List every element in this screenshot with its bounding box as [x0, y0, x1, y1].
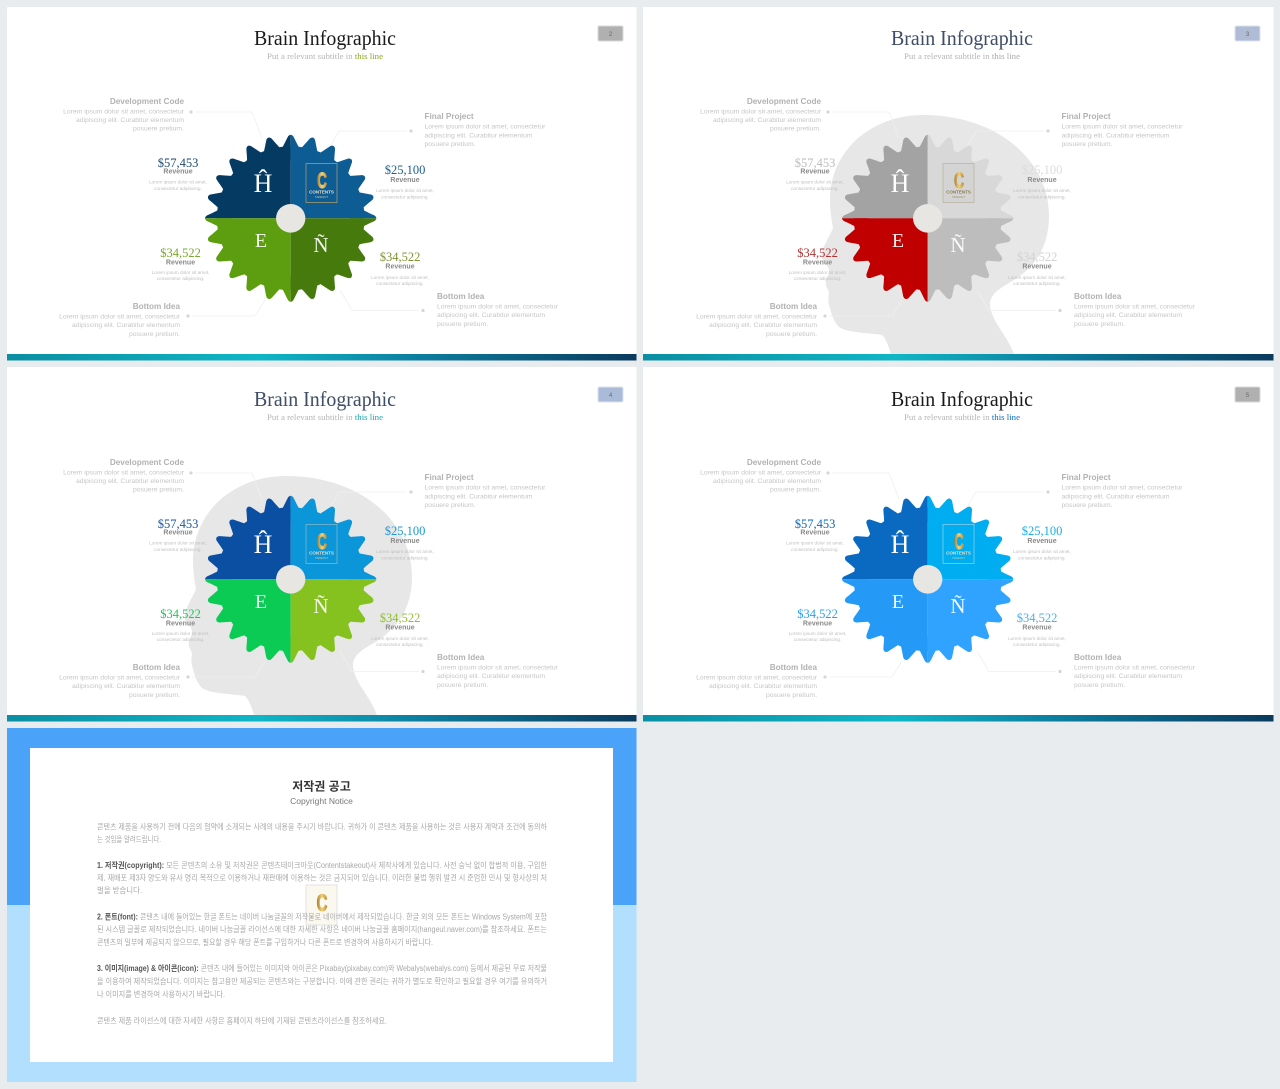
icon: logo watermark — [306, 885, 337, 925]
stat: 57,453: consectetur adipiscing. — [791, 186, 839, 191]
gear chart — [205, 496, 376, 663]
text block: development code: adipiscing elit. Curabitur elementum — [713, 478, 821, 485]
icon: logo — [306, 164, 337, 202]
stat: 34,522 right: Lorem ipsum dolor sit amet, — [1008, 636, 1066, 641]
slide panel — [7, 7, 636, 354]
text block: bottom idea left: adipiscing elit. Curabitur elementum — [709, 683, 817, 690]
page number badge — [1235, 387, 1260, 402]
text block: development code: adipiscing elit. Curabitur elementum — [76, 117, 184, 124]
text block: development code — [63, 458, 185, 494]
stat: 34,522 left: Lorem ipsum dolor sit amet, — [789, 631, 846, 636]
icon: logo — [943, 524, 974, 564]
page number badge: 5 — [1246, 393, 1250, 399]
text block: bottom idea left: Bottom Idea — [133, 663, 180, 672]
icon: logo: C — [317, 529, 327, 554]
stat: 25,100: Revenue — [1027, 177, 1057, 184]
text block: bottom idea left: adipiscing elit. Curabitur elementum — [709, 322, 817, 329]
text block: bottom idea right: posuere pretium. — [1074, 682, 1125, 689]
stat: 34,522 right: consectetur adipiscing. — [1013, 281, 1061, 286]
gear letters: E — [892, 591, 904, 613]
stat: 34,522 left: consectetur adipiscing. — [157, 637, 204, 642]
paragraph 1: copyright: 제, 재배포 제3자 양도와 유사 영리 목적으로 이용하거나 재판매에 이용하는 것은 금지되어 있습니다. 이러한 불법 행위 발견 시 준엄한 민사 및 형사상의 처 — [97, 872, 547, 882]
text block: final project: adipiscing elit. Curabitur elementum — [1062, 132, 1170, 140]
subtitle: Put a relevant subtitle in this line — [904, 412, 1020, 422]
stat: 34,522 left — [152, 246, 209, 281]
text block: bottom idea left: Bottom Idea — [770, 663, 817, 672]
text block: bottom idea right: Lorem ipsum dolor sit amet, consectetur — [437, 664, 559, 672]
stat: 34,522 left: consectetur adipiscing. — [794, 276, 841, 281]
stat: 34,522 right: Revenue — [1022, 624, 1052, 632]
icon: logo: TAKEOUT — [315, 195, 328, 199]
bottom gradient bar — [7, 715, 636, 722]
text block: final project — [1062, 473, 1183, 509]
page number badge: 2 — [609, 32, 613, 38]
text block: bottom idea right — [437, 292, 559, 328]
stat: 57,453 — [786, 517, 844, 552]
notice subheading: Copyright Notice — [290, 796, 353, 806]
stat: 57,453: consectetur adipiscing. — [154, 186, 202, 191]
icon: logo: CONTENTS — [946, 190, 971, 194]
text block: bottom idea right: adipiscing elit. Curabitur elementum — [437, 673, 545, 680]
text block: development code: Development Code — [110, 97, 184, 106]
text block: bottom idea right: Bottom Idea — [437, 292, 485, 301]
slide 3: grey gear with red quadrant on head — [643, 7, 1274, 360]
icon: logo: TAKEOUT — [952, 556, 965, 560]
leader line: bottom idea left — [186, 300, 265, 318]
stat: 34,522 right: $34,522 — [380, 250, 420, 264]
text block: bottom idea right: adipiscing elit. Curabitur elementum — [1074, 673, 1182, 680]
text block: final project: adipiscing elit. Curabitur elementum — [424, 132, 533, 140]
bottom gradient bar — [7, 354, 636, 360]
text block: bottom idea right: adipiscing elit. Curabitur elementum — [437, 312, 545, 319]
stat: 25,100: Lorem ipsum dolor sit amet, — [1013, 188, 1071, 193]
page number badge: 4 — [609, 393, 613, 399]
text block: final project: Final Project — [424, 112, 474, 121]
text block: development code: Lorem ipsum dolor sit amet, consectetur — [63, 108, 185, 116]
gear chart — [842, 135, 1013, 302]
stat: 34,522 left: $34,522 — [160, 607, 201, 621]
stat: 25,100 — [376, 163, 434, 200]
text block: development code — [700, 97, 822, 132]
text block: bottom idea right: posuere pretium. — [437, 321, 488, 328]
stat: 57,453: Revenue — [800, 168, 830, 176]
stat: 25,100: Lorem ipsum dolor sit amet, — [1013, 549, 1071, 554]
gear letters — [891, 169, 966, 257]
icon: logo: TAKEOUT — [315, 556, 328, 560]
paragraph 3: image and icon — [97, 963, 547, 999]
stat: 34,522 right: $34,522 — [1017, 611, 1057, 625]
leader line: final project — [965, 490, 1050, 511]
background upper blue — [7, 728, 636, 905]
paragraph 2: font: 된 시스템 글꼴로 제작되었습니다. 네이버 나눔글꼴 라이선스에 대한 자세한 사항은 네이버 나눔글꼴 홈페이지(hangeul.naver.com)를 참조하세요. 폰트는 — [97, 924, 547, 934]
slide panel — [643, 7, 1274, 354]
stat: 34,522 left: Revenue — [166, 620, 195, 628]
stat: 34,522 right — [1008, 611, 1066, 647]
title: Brain Infographic — [891, 387, 1033, 411]
leader line: development code — [189, 110, 262, 138]
text block: bottom idea right: Bottom Idea — [437, 653, 485, 662]
stat: 57,453 — [786, 156, 844, 191]
icon: logo watermark: C — [317, 891, 327, 917]
text block: bottom idea left: adipiscing elit. Curabitur elementum — [72, 683, 180, 690]
gear chart — [842, 496, 1013, 663]
stat: 57,453 — [149, 156, 207, 191]
title: Brain Infographic — [254, 387, 396, 411]
stat: 34,522 right: $34,522 — [1017, 250, 1057, 264]
text block: development code: posuere pretium. — [133, 486, 184, 494]
text block: bottom idea left: posuere pretium. — [766, 331, 817, 338]
text block: bottom idea left: posuere pretium. — [766, 692, 817, 699]
gear chart — [205, 135, 376, 302]
gear letters: Ñ — [950, 594, 966, 618]
leader line: development code — [189, 471, 262, 499]
stat: 34,522 left — [152, 607, 209, 642]
stat: 34,522 right — [371, 611, 429, 647]
text block: development code: Development Code — [747, 97, 821, 106]
text block: development code: Lorem ipsum dolor sit amet, consectetur — [700, 470, 822, 476]
stat: 57,453: consectetur adipiscing. — [154, 547, 202, 552]
text block: bottom idea right: Lorem ipsum dolor sit amet, consectetur — [1074, 304, 1196, 310]
stat: 57,453: consectetur adipiscing. — [791, 547, 839, 552]
stat: 34,522 left: Lorem ipsum dolor sit amet, — [789, 270, 846, 275]
paragraph 2: font — [97, 912, 548, 947]
paragraph 3: image and icon: 나 이미지를 변경하여 사용하시기 바랍니다. — [97, 989, 225, 999]
icon: logo: TAKEOUT — [952, 195, 965, 199]
stat: 57,453: $57,453 — [795, 156, 835, 170]
gear letters: Ĥ — [891, 530, 910, 559]
gear letters: Ñ — [313, 233, 329, 257]
stat: 57,453 — [149, 517, 207, 552]
stat: 34,522 left: Lorem ipsum dolor sit amet, — [152, 270, 209, 275]
stat: 25,100: $25,100 — [1022, 524, 1062, 538]
icon: logo: CONTENTS — [309, 190, 334, 194]
icon: logo: CONTENTS — [309, 550, 334, 556]
gear letters: Ĥ — [254, 169, 273, 198]
text block: bottom idea left — [696, 302, 818, 338]
text block: bottom idea left: Lorem ipsum dolor sit amet, consectetur — [59, 674, 181, 682]
text block: final project: adipiscing elit. Curabitur elementum — [1062, 494, 1170, 500]
stat: 34,522 left: Lorem ipsum dolor sit amet, — [152, 631, 209, 636]
stat: 34,522 right: $34,522 — [380, 611, 420, 625]
leader line: development code — [826, 110, 899, 138]
stat: 57,453: Revenue — [163, 530, 193, 536]
text block: bottom idea left — [59, 302, 181, 338]
text block: final project: posuere pretium. — [424, 141, 476, 148]
text block: final project: Lorem ipsum dolor sit amet, consectetur — [424, 484, 546, 492]
text block: development code — [700, 458, 822, 494]
stat: 34,522 right: Lorem ipsum dolor sit amet, — [1008, 275, 1066, 280]
title: Brain Infographic — [891, 26, 1033, 50]
stat: 57,453: Lorem ipsum dolor sit amet, — [786, 540, 844, 546]
stat: 34,522 left: $34,522 — [797, 246, 838, 260]
text block: development code: posuere pretium. — [770, 486, 821, 494]
gear letters — [891, 530, 966, 618]
leader line: bottom idea left — [823, 300, 902, 318]
icon: logo: CONTENTS — [946, 550, 971, 556]
leader line: bottom idea right — [340, 651, 425, 673]
text block: bottom idea left: Lorem ipsum dolor sit amet, consectetur — [59, 314, 181, 320]
paragraph 3: image and icon: 을 이용하여 제작되었습니다. 이미지는 참고용만 제공되는 콘텐츠와는 구분합니다. 이에 관한 권리는 귀하가 별도로 확인하고 필요할 경우 여기를 유의하거 — [97, 976, 547, 986]
slide 6: copyright notice — [7, 728, 636, 1082]
stat: 34,522 left: consectetur adipiscing. — [157, 276, 204, 281]
stat: 34,522 right: consectetur adipiscing. — [376, 642, 424, 647]
text block: development code: adipiscing elit. Curabitur elementum — [713, 117, 821, 124]
page number badge — [1235, 26, 1260, 41]
intro paragraph: 콘텐츠 제품을 사용하기 전에 다음의 협약에 소개되는 사례의 내용을 주시기 바랍니다. 귀하가 이 콘텐츠 제품을 사용하는 것은 사용자 계약과 조건에 동의하 — [97, 822, 548, 832]
subtitle: Put a relevant subtitle in this line — [267, 51, 383, 61]
head silhouette — [822, 115, 1049, 354]
stat: 25,100 — [376, 524, 434, 560]
text block: final project — [424, 112, 546, 148]
stat: 34,522 left: consectetur adipiscing. — [794, 637, 841, 642]
text block: bottom idea right: posuere pretium. — [1074, 321, 1125, 328]
stat: 57,453: $57,453 — [158, 517, 198, 531]
stat: 34,522 right — [371, 250, 429, 286]
slide panel — [643, 367, 1274, 715]
leader line: bottom idea left — [186, 661, 265, 679]
stat: 25,100: Lorem ipsum dolor sit amet, — [376, 188, 434, 193]
stat: 34,522 left — [789, 246, 846, 281]
bottom gradient bar — [643, 354, 1274, 360]
text block: final project — [424, 473, 546, 509]
text block: bottom idea right — [1074, 292, 1196, 328]
paragraph 3: image and icon: 3. 이미지(image) & 아이콘(icon): 콘텐츠 내에 들어있는 이미지와 아이콘은 Pixabay(pixabay.com)와 Webalys(webalys.com) 등에서 제공된 무료 저작물 — [97, 963, 547, 973]
slide panel — [7, 367, 636, 715]
gear letters — [254, 530, 329, 618]
text block: development code: Lorem ipsum dolor sit amet, consectetur — [700, 108, 822, 116]
gear letters — [254, 169, 329, 257]
stat: 34,522 right: Lorem ipsum dolor sit amet, — [371, 636, 429, 641]
text block: bottom idea left: Lorem ipsum dolor sit amet, consectetur — [696, 674, 818, 682]
stat: 57,453: Revenue — [163, 168, 193, 176]
intro paragraph: 는 것임을 알려드립니다. — [97, 834, 161, 844]
slide 2: dark blue and green gear — [7, 7, 636, 360]
text block: bottom idea right: Bottom Idea — [1074, 653, 1122, 662]
text block: final project: Final Project — [1062, 112, 1111, 121]
leader line: bottom idea right — [340, 290, 425, 312]
gear letters: Ĥ — [891, 169, 910, 198]
text block: bottom idea left — [59, 663, 181, 699]
text block: final project: posuere pretium. — [1062, 141, 1113, 148]
text block: final project: posuere pretium. — [424, 502, 476, 509]
text block: final project — [1062, 112, 1183, 148]
text block: development code: posuere pretium. — [133, 126, 184, 132]
stat: 34,522 right: Revenue — [385, 624, 415, 632]
gear letters: Ĥ — [254, 530, 273, 559]
text block: bottom idea left: posuere pretium. — [129, 331, 180, 338]
white notice card — [30, 748, 613, 1062]
text block: bottom idea right: posuere pretium. — [437, 682, 488, 689]
text block: bottom idea left: Lorem ipsum dolor sit amet, consectetur — [696, 314, 818, 320]
icon: logo — [943, 164, 974, 202]
paragraph 2: font: 2. 폰트(font): 콘텐츠 내에 들어있는 한글 폰트는 네이버 나눔글꼴의 저작물로 네이버에서 제작되었습니다. 한글 외의 모든 폰트는 Windows System에 포함 — [97, 912, 548, 922]
stat: 25,100: $25,100 — [1022, 163, 1062, 177]
stat: 34,522 right: consectetur adipiscing. — [376, 281, 424, 286]
icon: logo: C — [317, 168, 327, 193]
text block: final project: Final Project — [424, 473, 474, 482]
paragraph 1: copyright: 벌을 받습니다. — [97, 885, 142, 895]
leader line: development code — [826, 471, 899, 499]
stat: 34,522 left — [789, 607, 846, 642]
notice heading: 저작권 공고 — [292, 778, 351, 794]
paragraph 2: font: 콘텐츠의 일부에 제공되지 않으므로, 필요할 경우 해당 폰트를 구입하거나 다른 폰트로 변경하여 사용하시기 바랍니다. — [97, 937, 433, 947]
closing line: 콘텐츠 제품 라이선스에 대한 자세한 사항은 홈페이지 하단에 기재된 콘텐츠라이선스를 참조하세요. — [97, 1016, 387, 1026]
stat: 34,522 left: Revenue — [803, 620, 832, 628]
stat: 34,522 right: Revenue — [1022, 264, 1052, 270]
stat: 25,100: consectetur adipiscing. — [381, 194, 429, 200]
stat: 57,453: Revenue — [800, 530, 830, 536]
stat: 25,100: $25,100 — [385, 524, 425, 538]
stat: 34,522 right: Lorem ipsum dolor sit amet, — [371, 275, 429, 280]
leader line: final project — [328, 490, 413, 511]
stat: 57,453: Lorem ipsum dolor sit amet, — [786, 180, 844, 184]
text block: bottom idea right: Lorem ipsum dolor sit amet, consectetur — [437, 304, 559, 310]
text block: final project: Lorem ipsum dolor sit amet, consectetur — [424, 124, 546, 130]
text block: final project: Final Project — [1062, 473, 1111, 482]
stat: 25,100 — [1013, 524, 1071, 560]
text block: bottom idea right — [437, 653, 559, 689]
text block: development code: adipiscing elit. Curabitur elementum — [76, 478, 184, 485]
page number badge — [598, 387, 623, 402]
subtitle: Put a relevant subtitle in this line — [267, 412, 383, 422]
stat: 34,522 right: consectetur adipiscing. — [1013, 642, 1061, 647]
leader line: final project — [965, 129, 1050, 150]
icon: logo: C — [954, 529, 964, 554]
stat: 25,100 — [1013, 163, 1071, 200]
stat: 34,522 left: $34,522 — [797, 607, 838, 621]
text block: bottom idea left: adipiscing elit. Curabitur elementum — [72, 322, 180, 329]
text block: final project: adipiscing elit. Curabitur elementum — [424, 494, 533, 500]
title: Brain Infographic — [254, 26, 396, 50]
text block: development code: Development Code — [747, 458, 821, 467]
icon: logo: C — [954, 168, 964, 193]
gear letters: E — [255, 591, 267, 613]
stat: 57,453: $57,453 — [158, 156, 198, 170]
gear letters: E — [892, 230, 904, 252]
stat: 25,100: consectetur adipiscing. — [1018, 194, 1066, 200]
stat: 34,522 left: Revenue — [166, 260, 195, 266]
paragraph 1: copyright: 1. 저작권(copyright): 모든 콘텐츠의 소유 및 저작권은 콘텐츠테이크아웃(Contentstakeout)사 제작사에게 있습니다. 사전 승낙 없이 합법적 이용, 구입한 — [97, 860, 548, 870]
gear letters: Ñ — [950, 233, 966, 257]
icon: logo — [306, 524, 337, 564]
stat: 25,100: Revenue — [1027, 538, 1057, 545]
bottom gradient bar — [643, 715, 1274, 722]
stat: 34,522 right: Revenue — [385, 264, 415, 270]
leader line: final project — [328, 129, 413, 150]
leader line: bottom idea right — [977, 290, 1062, 312]
slide 5: all blue gear — [643, 367, 1274, 722]
text block: bottom idea left — [696, 663, 818, 699]
text block: final project: Lorem ipsum dolor sit amet, consectetur — [1062, 484, 1183, 492]
stat: 25,100: Revenue — [390, 177, 420, 184]
page number badge — [598, 26, 623, 41]
stat: 57,453: Lorem ipsum dolor sit amet, — [149, 540, 207, 546]
text block: development code — [63, 97, 185, 132]
text block: bottom idea left: Bottom Idea — [770, 302, 817, 311]
stat: 25,100: $25,100 — [385, 163, 425, 177]
intro paragraph — [97, 822, 548, 844]
leader line: bottom idea left — [823, 661, 902, 679]
paragraph 1: copyright — [97, 860, 548, 895]
stat: 25,100: consectetur adipiscing. — [381, 556, 429, 560]
background lower light blue — [7, 905, 636, 1082]
leader line: bottom idea right — [977, 651, 1062, 673]
text block: development code: Development Code — [110, 458, 184, 467]
stat: 25,100: Lorem ipsum dolor sit amet, — [376, 549, 434, 554]
text block: bottom idea right: Bottom Idea — [1074, 292, 1122, 301]
text block: bottom idea right — [1074, 653, 1196, 689]
text block: development code: posuere pretium. — [770, 126, 821, 132]
text block: bottom idea left: Bottom Idea — [133, 302, 180, 311]
gear letters: E — [255, 230, 267, 252]
stat: 34,522 left: Revenue — [803, 260, 832, 266]
text block: development code: Lorem ipsum dolor sit amet, consectetur — [63, 470, 185, 476]
stat: 25,100: consectetur adipiscing. — [1018, 556, 1066, 560]
subtitle: Put a relevant subtitle in this line — [904, 51, 1020, 61]
stat: 25,100: Revenue — [390, 538, 420, 545]
stat: 34,522 left: $34,522 — [160, 246, 201, 260]
head silhouette — [185, 476, 412, 715]
text block: bottom idea left: posuere pretium. — [129, 692, 180, 699]
text block: final project: posuere pretium. — [1062, 502, 1113, 509]
stat: 57,453: $57,453 — [795, 517, 835, 531]
gear letters: Ñ — [313, 594, 329, 618]
stat: 34,522 right — [1008, 250, 1066, 286]
text block: bottom idea right: Lorem ipsum dolor sit amet, consectetur — [1074, 664, 1196, 672]
slide 4: blue and green gear on head — [7, 367, 636, 722]
text block: final project: Lorem ipsum dolor sit amet, consectetur — [1062, 124, 1183, 130]
text block: bottom idea right: adipiscing elit. Curabitur elementum — [1074, 312, 1182, 319]
stat: 57,453: Lorem ipsum dolor sit amet, — [149, 180, 207, 184]
page number badge: 3 — [1246, 32, 1250, 38]
